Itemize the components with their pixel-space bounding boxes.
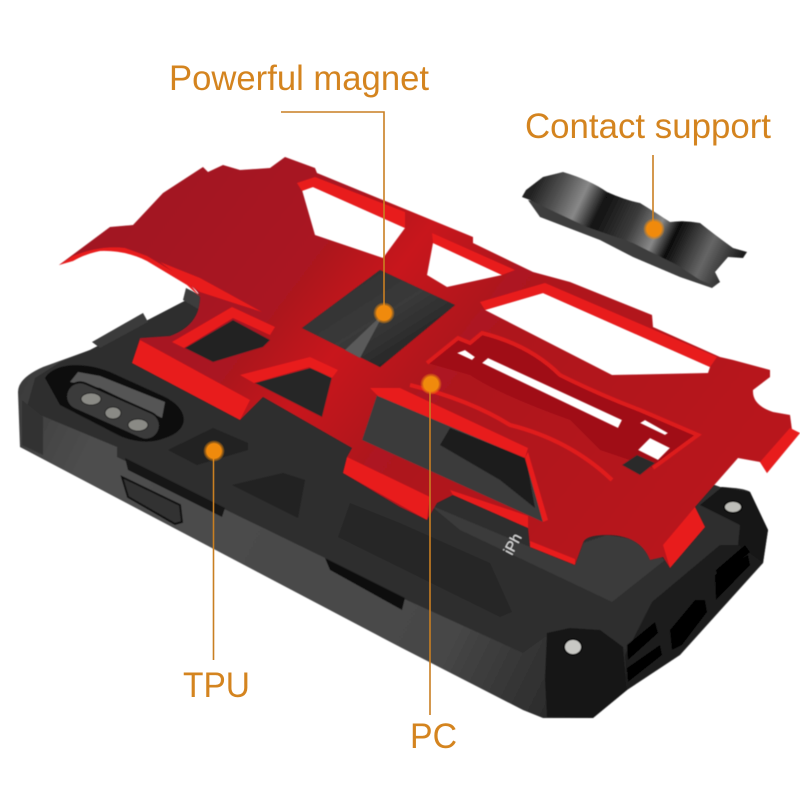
window centre [255,368,332,417]
camera bevel [70,372,165,418]
TPU pad two [232,473,305,518]
second side slot [325,558,405,610]
TPU pad one [168,428,248,465]
stand recess [427,333,698,468]
stand wavy edge [410,385,612,480]
camera lens pill [62,378,164,444]
callout: PC [410,373,457,756]
marker dot [643,218,665,240]
callout: Powerful magnet: Powerful magnet [169,59,429,98]
callout: Powerful magnet [169,59,429,324]
marker dot [373,302,395,324]
top notch bump [183,288,200,310]
leader line [429,384,431,715]
callout: PC: PC [410,717,457,756]
plate body with cut-outs [59,157,800,568]
leader line [212,451,214,660]
inner lighter panel [430,505,665,602]
left side bump [92,313,148,348]
side corner block [22,400,43,455]
magnet plate [302,270,455,367]
screw top [724,501,742,513]
magnet cone highlight [345,313,384,358]
window inner shadow [440,428,535,508]
callout: Contact support [525,107,771,240]
callout: Contact support: Contact support [525,107,771,146]
bevel strips [59,177,800,568]
red metal plate [59,157,800,568]
side slot [125,458,225,517]
callout: TPU [183,440,250,705]
volume button [122,477,182,524]
screw bottom [564,639,582,655]
marker dot [203,440,225,462]
window large [362,395,543,522]
stand recess floor [427,333,698,468]
case top face [26,293,768,653]
engraved text: iPh [501,531,526,558]
port frame [625,545,763,690]
contact support clip [522,172,747,288]
phone case body [18,288,768,718]
marker dot [420,373,442,395]
leader line [281,112,384,313]
case side face [18,293,768,718]
dark window through plate [622,455,655,475]
TPU pad three [338,503,512,617]
camera surround [45,365,184,442]
speaker grilles [627,545,750,682]
charging port [670,600,707,650]
clip top face [522,172,747,285]
window left [185,320,270,362]
leader line [652,155,654,229]
callout: TPU: TPU [183,666,250,705]
clip side face [528,200,720,288]
corner bumper bottom [545,628,627,718]
camera lenses [81,393,148,431]
corner bumper top right [700,487,768,563]
